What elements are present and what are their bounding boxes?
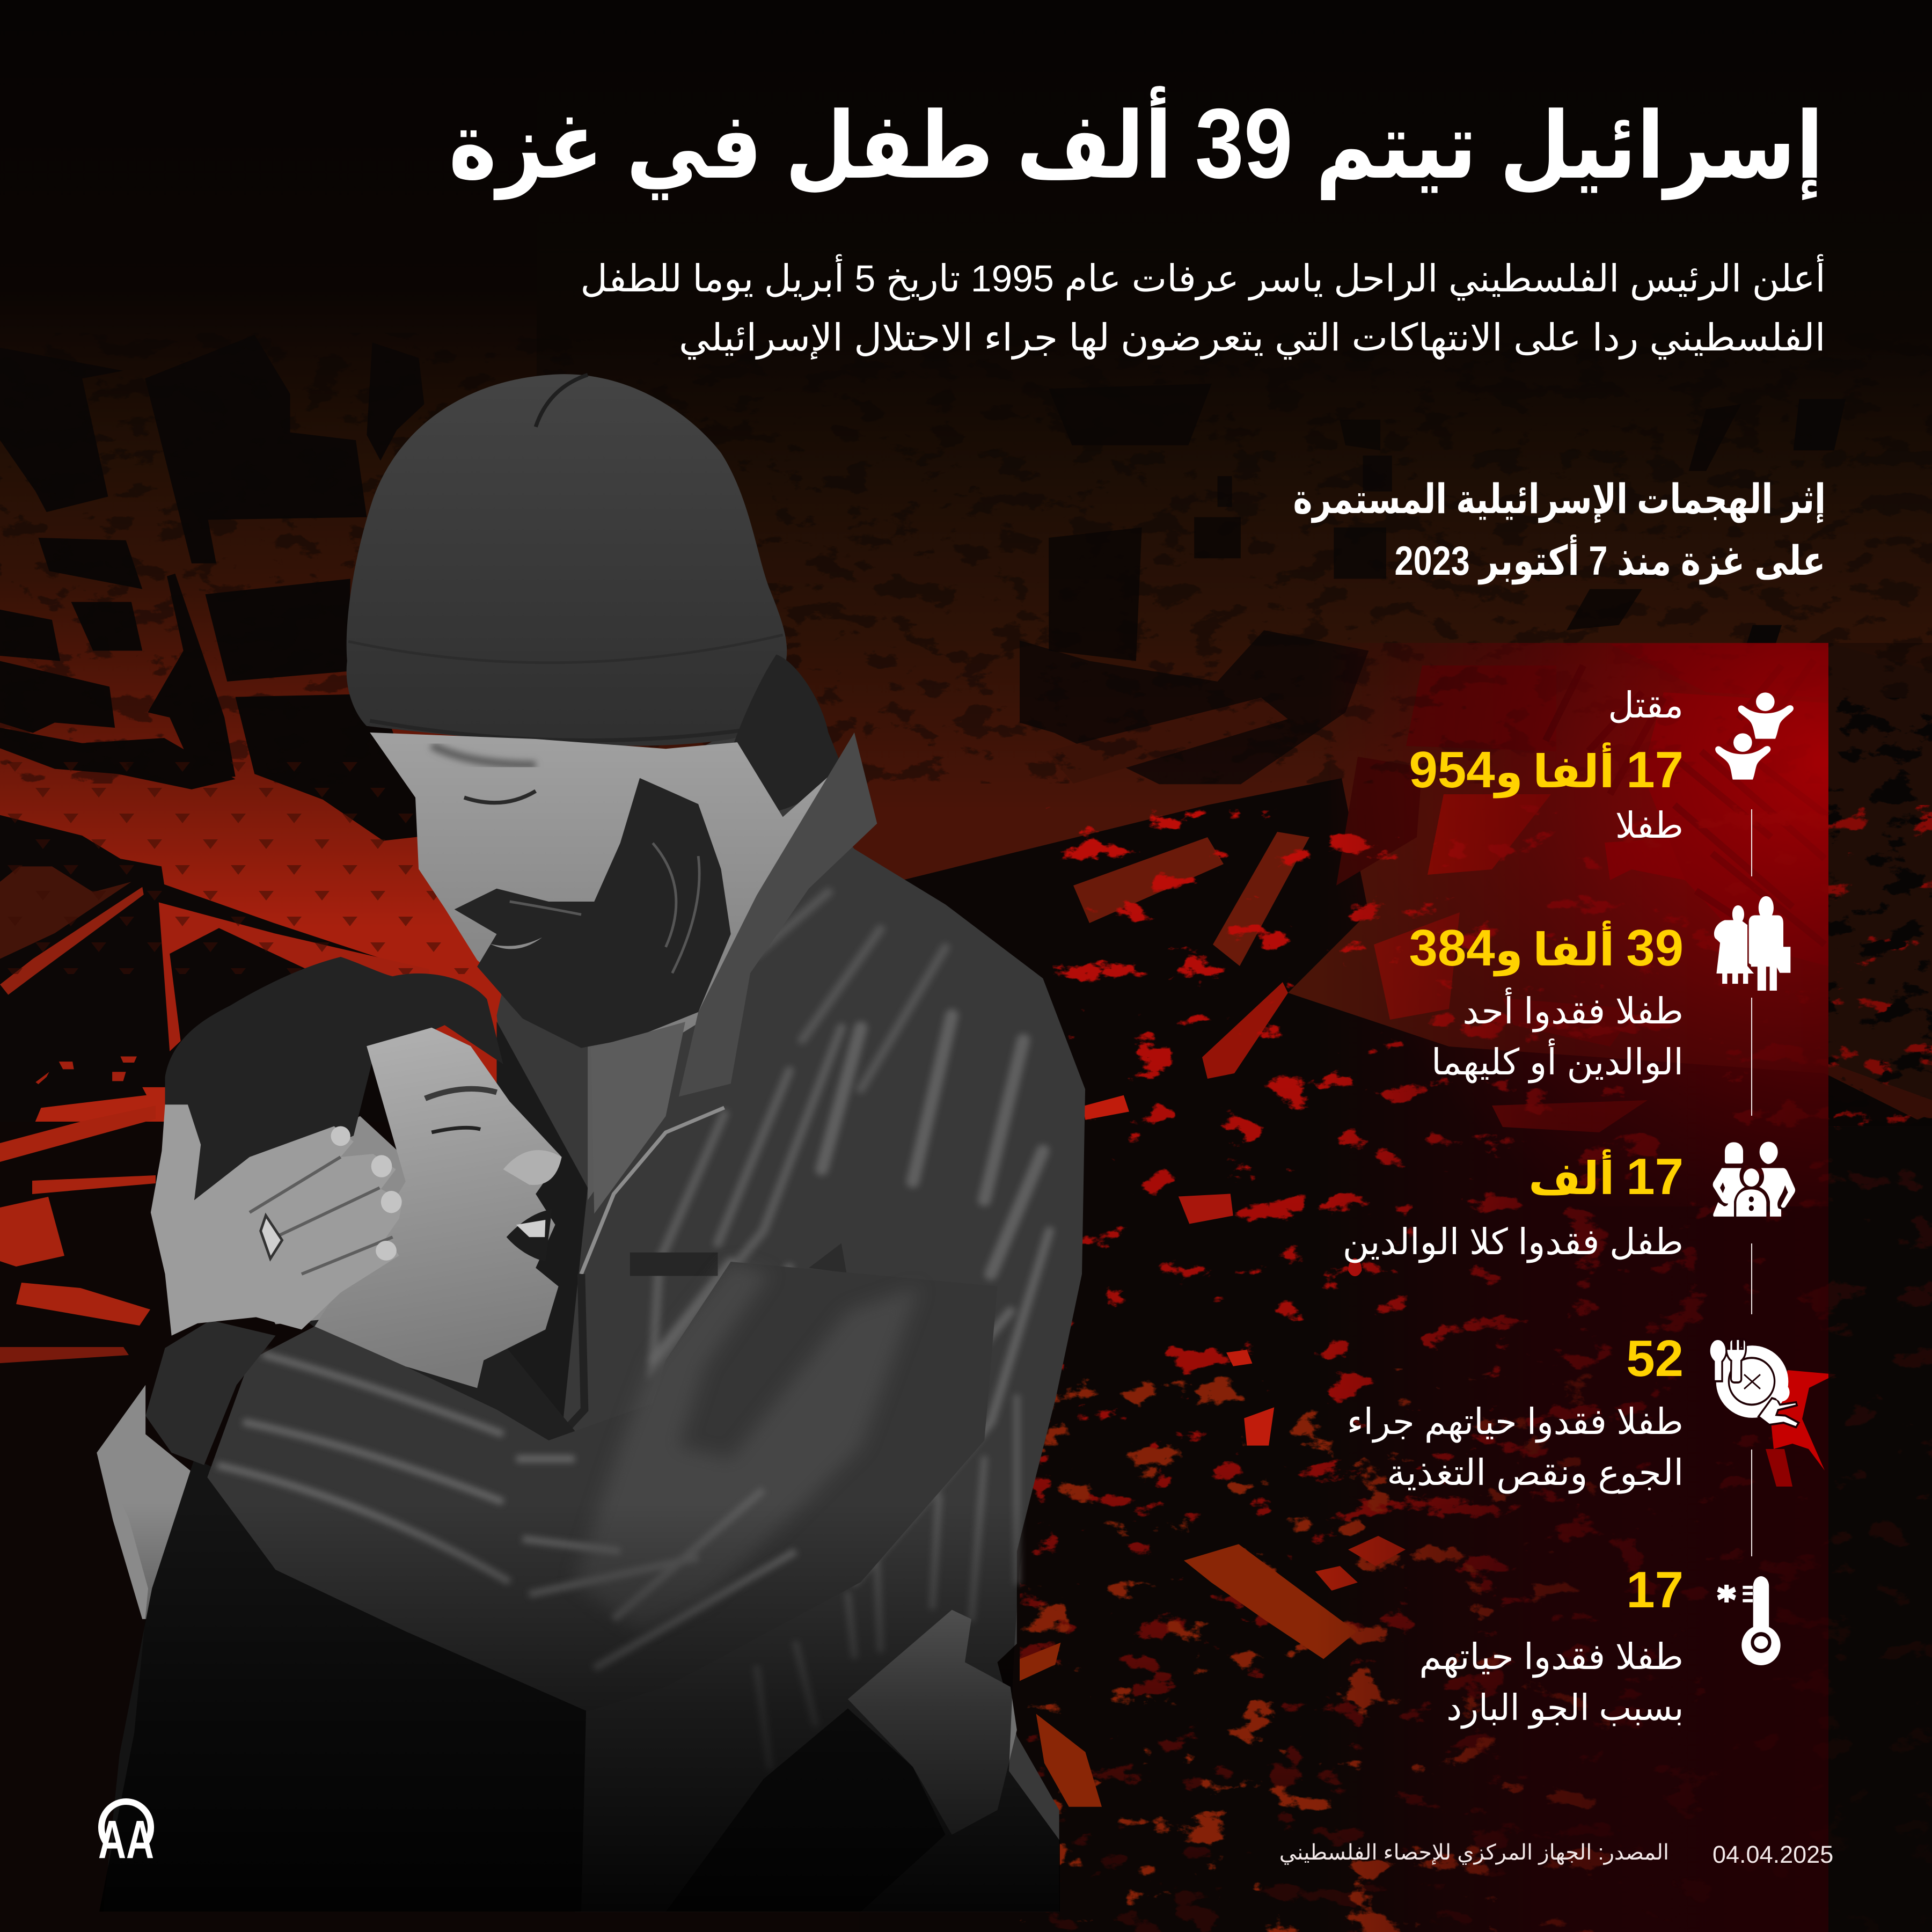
icon: separator 2 bbox=[1751, 998, 1752, 1116]
icon: parents with suitcase bbox=[1714, 896, 1790, 991]
intro paragraph: الفلسطيني ردا على الانتهاكات التي يتعرضون لها جراء الاحتلال الإسرائيلي bbox=[679, 317, 1826, 358]
right-side buildings bbox=[1020, 384, 1846, 784]
logo: Anadolu Agency bbox=[98, 1802, 154, 1870]
icon: separator 3 bbox=[1751, 1243, 1752, 1314]
stat 5: cold deaths: بسبب الجو البارد bbox=[1446, 1688, 1684, 1728]
section heading bbox=[1293, 477, 1826, 585]
lower ground bbox=[0, 1122, 1046, 1932]
black streaks on bright debris bbox=[1546, 660, 1827, 950]
boy's hair bbox=[165, 957, 503, 1207]
stat 2: children lost a parent bbox=[0, 912, 1932, 1095]
section heading: إثر الهجمات الإسرائيلية المستمرة bbox=[1293, 477, 1826, 522]
red fragments inside panel top bbox=[1202, 644, 1828, 1132]
photo fade to black bbox=[99, 1525, 1060, 1912]
left strip red debris bbox=[0, 1106, 156, 1363]
stat 1: children killed: مقتل bbox=[1608, 685, 1684, 726]
intro paragraph: أعلن الرئيس الفلسطيني الراحل ياسر عرفات عام 1995 تاريخ 5 أبريل يوما للطفل bbox=[581, 258, 1826, 299]
man's hidden wrist bbox=[97, 1385, 191, 1619]
stat 5: cold deaths: 17 bbox=[1626, 1561, 1684, 1619]
stat 2: children lost a parent: الوالدين أو كليهما bbox=[1431, 1042, 1684, 1082]
left buildings silhouettes bbox=[0, 335, 429, 841]
stat 4: hunger deaths bbox=[0, 1328, 1932, 1505]
stat 3: children lost both parents bbox=[0, 1146, 1932, 1275]
hat bbox=[347, 374, 787, 746]
source: المصدر: الجهاز المركزي للإحصاء الفلسطيني bbox=[1279, 1841, 1669, 1864]
grunge speck layers bbox=[0, 333, 1932, 784]
boy's face bbox=[314, 1028, 562, 1388]
panel: statistics backdrop bbox=[1315, 643, 1932, 1932]
stat 1: children killed: طفلا bbox=[1615, 806, 1684, 846]
icon: family of three bbox=[1713, 1142, 1795, 1217]
boy's head base bbox=[197, 1116, 445, 1324]
stat 5: cold deaths: طفلا فقدوا حياتهم bbox=[1419, 1637, 1684, 1677]
left rubble heap bbox=[0, 815, 429, 1128]
icon: plate, cutlery and hungry child bbox=[1709, 1339, 1799, 1428]
jacket stripes bbox=[575, 818, 1049, 1767]
section heading: على غزة منذ 7 أكتوبر 2023 bbox=[1395, 538, 1826, 584]
icon: two children with raised arms bbox=[1715, 692, 1794, 780]
man's sleeve around boy bbox=[145, 1262, 997, 1711]
icon: cold thermometer bbox=[1718, 1576, 1781, 1665]
zipper and inner placket bbox=[496, 997, 846, 1434]
dark rubble ground bbox=[859, 778, 1932, 1932]
stat 2: children lost a parent: طفلا فقدوا أحد bbox=[1462, 991, 1684, 1031]
stat 5: cold deaths bbox=[0, 1561, 1932, 1743]
icon: separator 1 bbox=[1751, 809, 1752, 876]
logo: Anadolu Agency: AA bbox=[98, 1810, 154, 1870]
stat 4: hunger deaths: طفلا فقدوا حياتهم جراء bbox=[1347, 1402, 1684, 1442]
man's jacket body bbox=[496, 720, 1085, 1912]
stat 2: children lost a parent: 39 ألفا و384 bbox=[1409, 919, 1684, 977]
stat 4: hunger deaths: 52 bbox=[1626, 1330, 1684, 1387]
stat 3: children lost both parents: 17 ألف bbox=[1528, 1148, 1684, 1205]
man's hair and face bbox=[370, 654, 877, 1214]
boy's hand clutching jacket bbox=[666, 1610, 1017, 1912]
stat 1: children killed bbox=[0, 682, 1932, 853]
date: 04.04.2025 bbox=[1713, 1841, 1833, 1868]
large orange debris slabs bbox=[1020, 1095, 1406, 1807]
title: إسرائيل تيتم 39 ألف طفل في غزة bbox=[449, 89, 1824, 199]
boy's neck shadow gap bbox=[302, 1317, 588, 1453]
icon: separator 4 bbox=[1751, 1450, 1752, 1556]
stat 3: children lost both parents: طفل فقدوا كلا الوالدين bbox=[1343, 1222, 1684, 1262]
man's hand on boy's face bbox=[151, 1104, 402, 1336]
intro paragraph bbox=[581, 254, 1826, 360]
stat 1: children killed: 17 ألفا و954 bbox=[1409, 741, 1684, 799]
boy's black body bbox=[103, 1459, 588, 1912]
photo: father embracing crying boy bbox=[80, 374, 1100, 1912]
stat 4: hunger deaths: الجوع ونقص التغذية bbox=[1387, 1453, 1684, 1493]
